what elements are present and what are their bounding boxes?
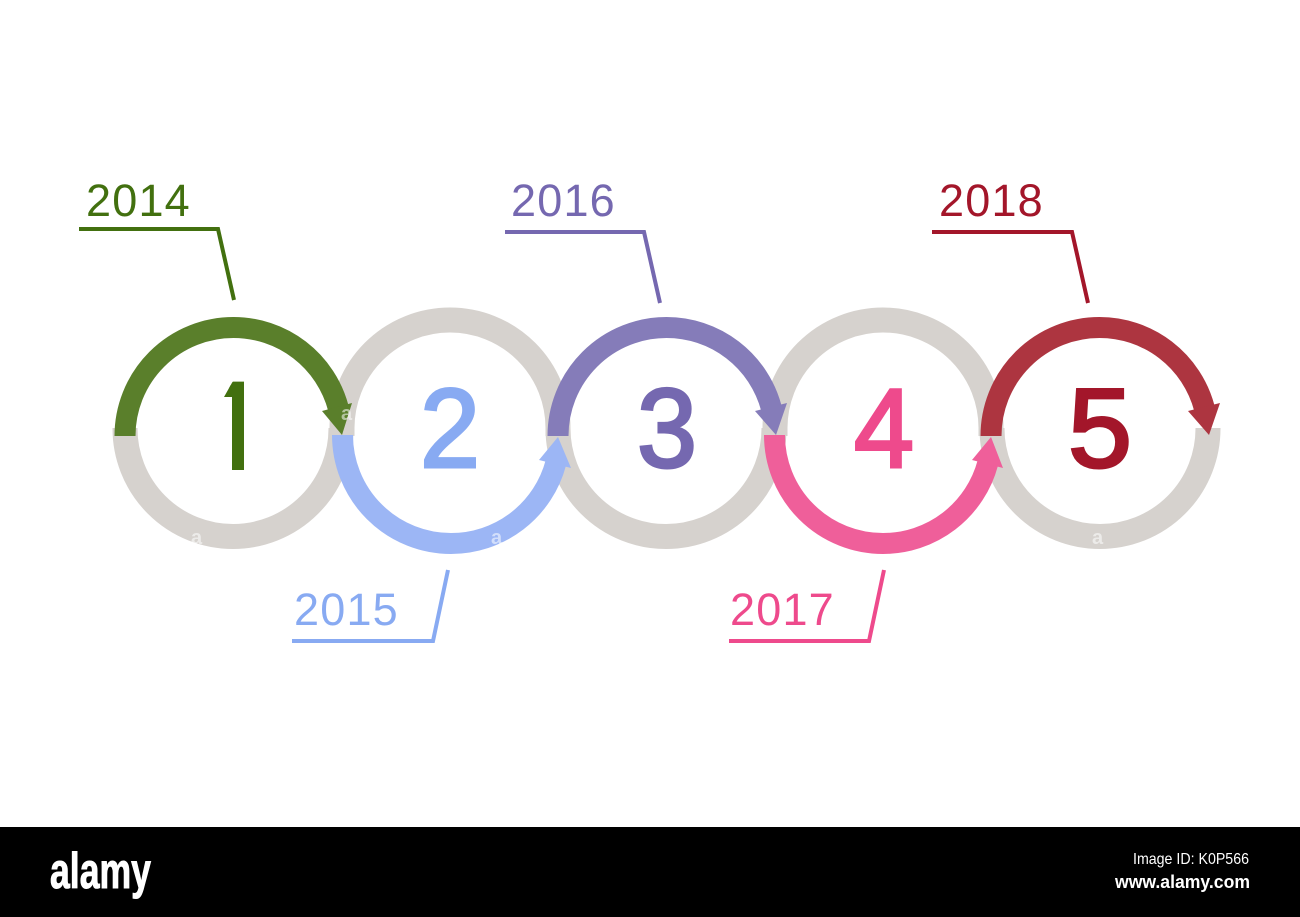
label 2016	[505, 175, 660, 303]
label 2014	[79, 175, 234, 300]
watermark marks	[191, 403, 1104, 549]
watermark marks: a	[1092, 527, 1104, 549]
website: www.alamy.com	[1114, 872, 1250, 892]
step 3 arrow: purple	[558, 328, 787, 436]
number 1: 1	[199, 355, 273, 502]
footer bar	[0, 827, 1300, 917]
step 5 arrow: red	[991, 328, 1220, 436]
label 2014: 2014	[86, 175, 191, 226]
watermark marks: a	[341, 403, 353, 425]
step 1 arrow: green	[125, 328, 352, 436]
number 4: 4	[854, 366, 914, 491]
label 2016: 2016	[511, 175, 616, 226]
watermark marks: a	[191, 527, 203, 549]
timeline infographic	[0, 184, 1300, 917]
label 2015	[292, 570, 448, 641]
label 2017: 2017	[730, 584, 835, 635]
label 2015: 2015	[294, 584, 399, 635]
number 3: 3	[637, 366, 697, 491]
label 2018: 2018	[939, 175, 1044, 226]
step 2 arrow: blue	[342, 435, 571, 544]
step 4 arrow: pink	[774, 435, 1003, 544]
number 5: 5	[1068, 366, 1132, 491]
alamy logo: alamy	[50, 843, 151, 899]
number 2: 2	[420, 366, 480, 491]
label 2018	[932, 175, 1088, 303]
watermark marks: a	[491, 527, 503, 549]
image id: Image ID: K0P566	[1133, 851, 1249, 868]
label 2017	[729, 570, 884, 641]
grey background rings	[125, 320, 1208, 536]
